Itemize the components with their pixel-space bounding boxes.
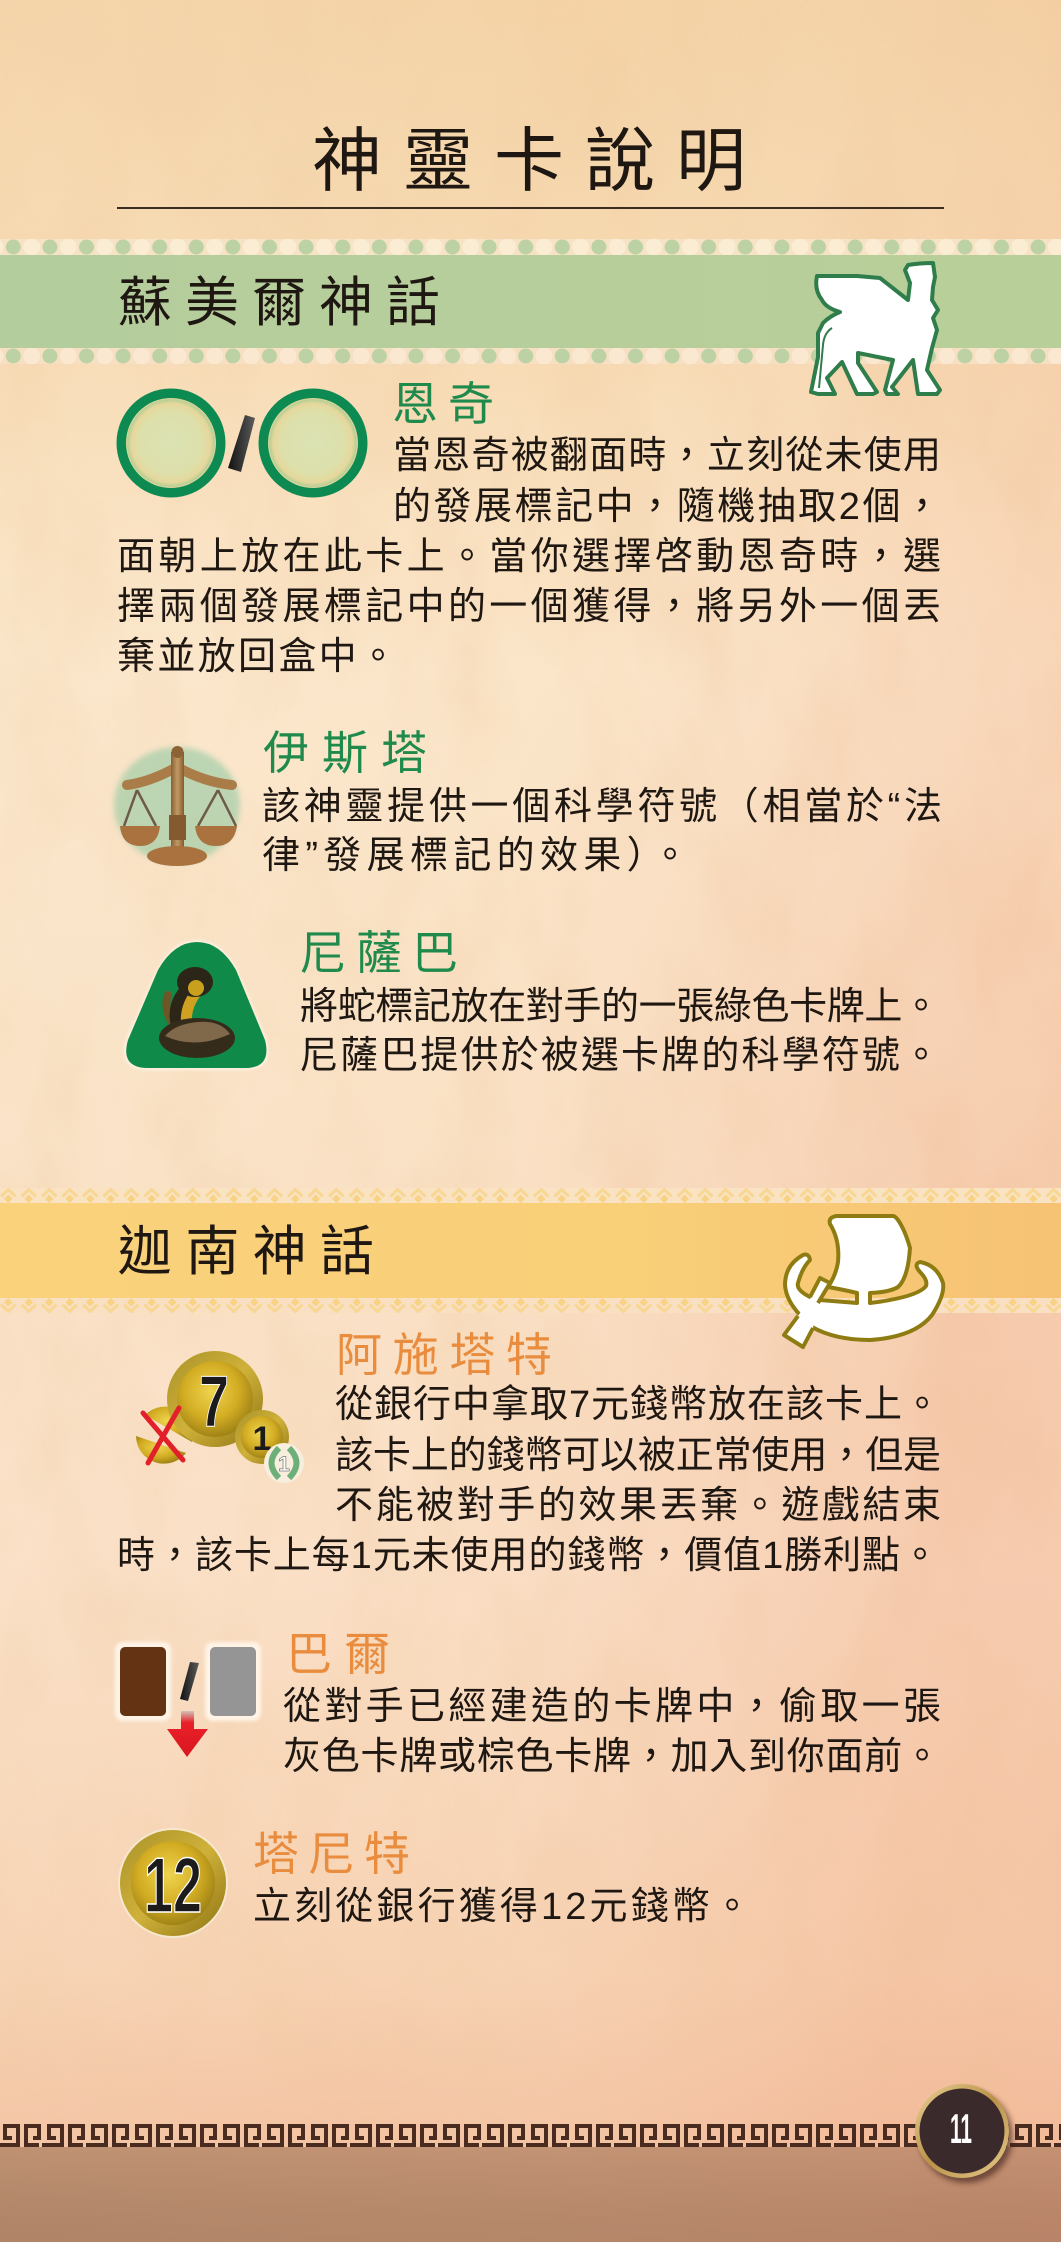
- section heading: Canaanite: 迦南神話: [118, 1222, 374, 1282]
- text: Enki rules: 的發展標記中，隨機抽取2個，: [393, 486, 941, 528]
- text: Baal rules: 灰色卡牌或棕色卡牌，加入到你面前。: [283, 1736, 941, 1778]
- icon: two tokens: [116, 388, 368, 498]
- greek key border: [0, 2124, 1061, 2147]
- text: Tanit rules: 立刻從銀行獲得12元錢幣。: [253, 1886, 751, 1928]
- Nisaba block: [124, 927, 940, 1077]
- heading: Ishtar: 伊斯塔: [263, 727, 427, 779]
- icon: coins: 7: [199, 1362, 229, 1442]
- heading: Nisaba: 尼薩巴: [300, 927, 458, 979]
- Ishtar block: [114, 727, 942, 877]
- heading: Astarte: 阿施塔特: [336, 1329, 552, 1381]
- text: Nisaba rules: [300, 986, 940, 1077]
- text: Baal rules: 從對手已經建造的卡牌中，偷取一張: [283, 1686, 941, 1728]
- text: Ishtar rules: 律”發展標記的效果）。: [262, 835, 689, 877]
- Baal block: [115, 1628, 941, 1778]
- Enki block: [116, 378, 941, 678]
- text: Baal rules: [283, 1686, 941, 1778]
- text: Astarte rules: 時，該卡上每1元未使用的錢幣，價值1勝利點。: [117, 1535, 939, 1577]
- text: Ishtar rules: [262, 786, 942, 877]
- footer band: [0, 2124, 1061, 2242]
- heading: Tanit: 塔尼特: [253, 1828, 410, 1880]
- icon: ship: [784, 1216, 943, 1347]
- heading: Enki: 恩奇: [392, 378, 494, 430]
- text: Astarte rules: [117, 1384, 941, 1577]
- text: Astarte rules: 從銀行中拿取7元錢幣放在該卡上。: [335, 1384, 941, 1426]
- icon: snake token: [124, 940, 268, 1070]
- page number badge: 11: [950, 2105, 972, 2152]
- Tanit block: [118, 1828, 751, 1938]
- text: Nisaba rules: 將蛇標記放在對手的一張綠色卡牌上。: [300, 986, 940, 1028]
- text: Astarte rules: 不能被對手的效果丟棄。遊戲結束: [335, 1485, 941, 1527]
- title: 神靈卡說明: [312, 122, 746, 200]
- text: Enki rules: 面朝上放在此卡上。當你選擇啓動恩奇時，選: [117, 536, 941, 578]
- Astarte block: [117, 1329, 941, 1577]
- icon: coins: 1: [278, 1453, 290, 1476]
- icon: coin 12: [118, 1828, 228, 1938]
- text: Enki rules: 當恩奇被翻面時，立刻從未使用: [393, 435, 941, 477]
- text: Enki rules: [117, 435, 941, 678]
- icon: coins: 1: [253, 1420, 271, 1458]
- text: Nisaba rules: 尼薩巴提供於被選卡牌的科學符號。: [300, 1035, 940, 1077]
- page number badge: [915, 2084, 1013, 2183]
- text: Ishtar rules: 該神靈提供一個科學符號（相當於“法: [262, 786, 942, 828]
- text: Enki rules: 擇兩個發展標記中的一個獲得，將另外一個丟: [117, 586, 941, 628]
- icon: scales: [114, 746, 240, 866]
- section heading: Sumerian: 蘇美爾神話: [118, 273, 440, 333]
- heading: Baal: 巴爾: [286, 1628, 390, 1680]
- icon: winged lion: [811, 263, 940, 394]
- section banner: Sumerian mythology: [0, 239, 1061, 364]
- text: Enki rules: 棄並放回盒中。: [117, 636, 397, 678]
- text: Astarte rules: 該卡上的錢幣可以被正常使用，但是: [335, 1435, 941, 1477]
- icon: coin 12: 12: [144, 1841, 202, 1929]
- icon: coins: [136, 1351, 304, 1483]
- section banner: Canaanite mythology: [0, 1188, 1061, 1313]
- icon: brown and grey cards with arrow: [115, 1642, 261, 1757]
